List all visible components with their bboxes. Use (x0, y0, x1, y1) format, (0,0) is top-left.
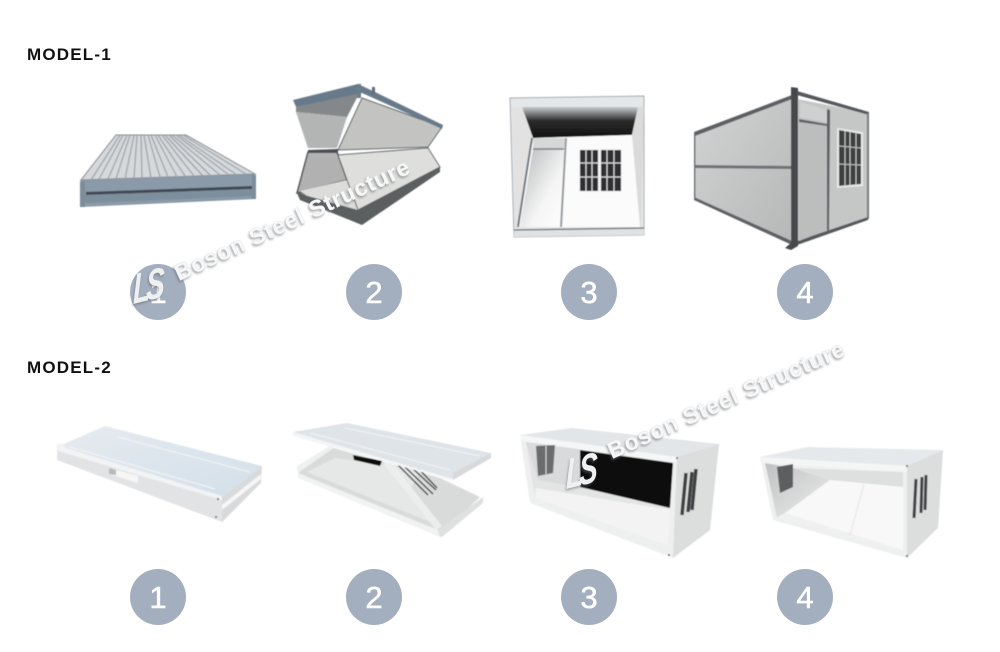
illustration: model 2 step 3, open unit with black back wall (520, 428, 719, 558)
watermark: Boson Steel Structure, lower right (566, 335, 849, 498)
icon: louvre vent on right wall, model 2 step 4 (914, 475, 926, 518)
heading: MODEL-2: MODEL-2 (27, 358, 112, 377)
icon: side window on left wall, model 2 step 4 (777, 464, 793, 493)
illustration: model 1 step 1, folded flat pack (80, 135, 256, 207)
step badge: model 2 step 3: 3 (580, 580, 598, 615)
illustration: model 1 step 2, half unfolded (293, 84, 443, 225)
illustration: model 2 step 2, half unfolded (293, 423, 491, 537)
step badge: model 2 step 4: 4 (796, 580, 814, 615)
watermark: Boson Steel Structure, upper left: Boson Steel Structure (170, 153, 414, 286)
icon: louvre vent on right wall (682, 469, 696, 515)
step badge: model 1 step 2: 2 (365, 275, 383, 310)
heading: MODEL-1: MODEL-1 (27, 45, 112, 64)
icon: barred window, interior view (579, 149, 622, 192)
step badge: model 2 step 4 (777, 569, 833, 625)
step badge: model 1 step 1 (130, 264, 186, 320)
step badge: model 2 step 1: 1 (149, 580, 167, 615)
watermark: Boson Steel Structure, lower right: LS (566, 442, 598, 498)
step badge: model 2 step 1 (130, 569, 186, 625)
icon: side window on left wall (536, 445, 555, 476)
illustration: model 1 step 4, fully erected unit (694, 87, 869, 250)
step badge: model 1 step 1: 1 (149, 275, 167, 310)
step badge: model 1 step 2 (346, 264, 402, 320)
step badge: model 2 step 2: 2 (365, 580, 383, 615)
step badge: model 1 step 4: 4 (796, 275, 814, 310)
step badge: model 2 step 2 (346, 569, 402, 625)
step badge: model 1 step 3: 3 (580, 275, 598, 310)
icon: barred window, exterior view (837, 128, 863, 188)
step badge: model 2 step 3 (561, 569, 617, 625)
watermark: Boson Steel Structure, upper left: LS (133, 257, 165, 313)
step badge: model 1 step 4 (777, 264, 833, 320)
illustration: model 2 step 4, open finished unit (760, 447, 943, 558)
watermark: Boson Steel Structure, lower right: Boson Steel Structure (603, 335, 849, 464)
illustration: model 2 step 1, folded flat pack (56, 426, 262, 522)
illustration: model 1 step 3, opening with door and window (510, 96, 644, 237)
step badge: model 1 step 3 (561, 264, 617, 320)
